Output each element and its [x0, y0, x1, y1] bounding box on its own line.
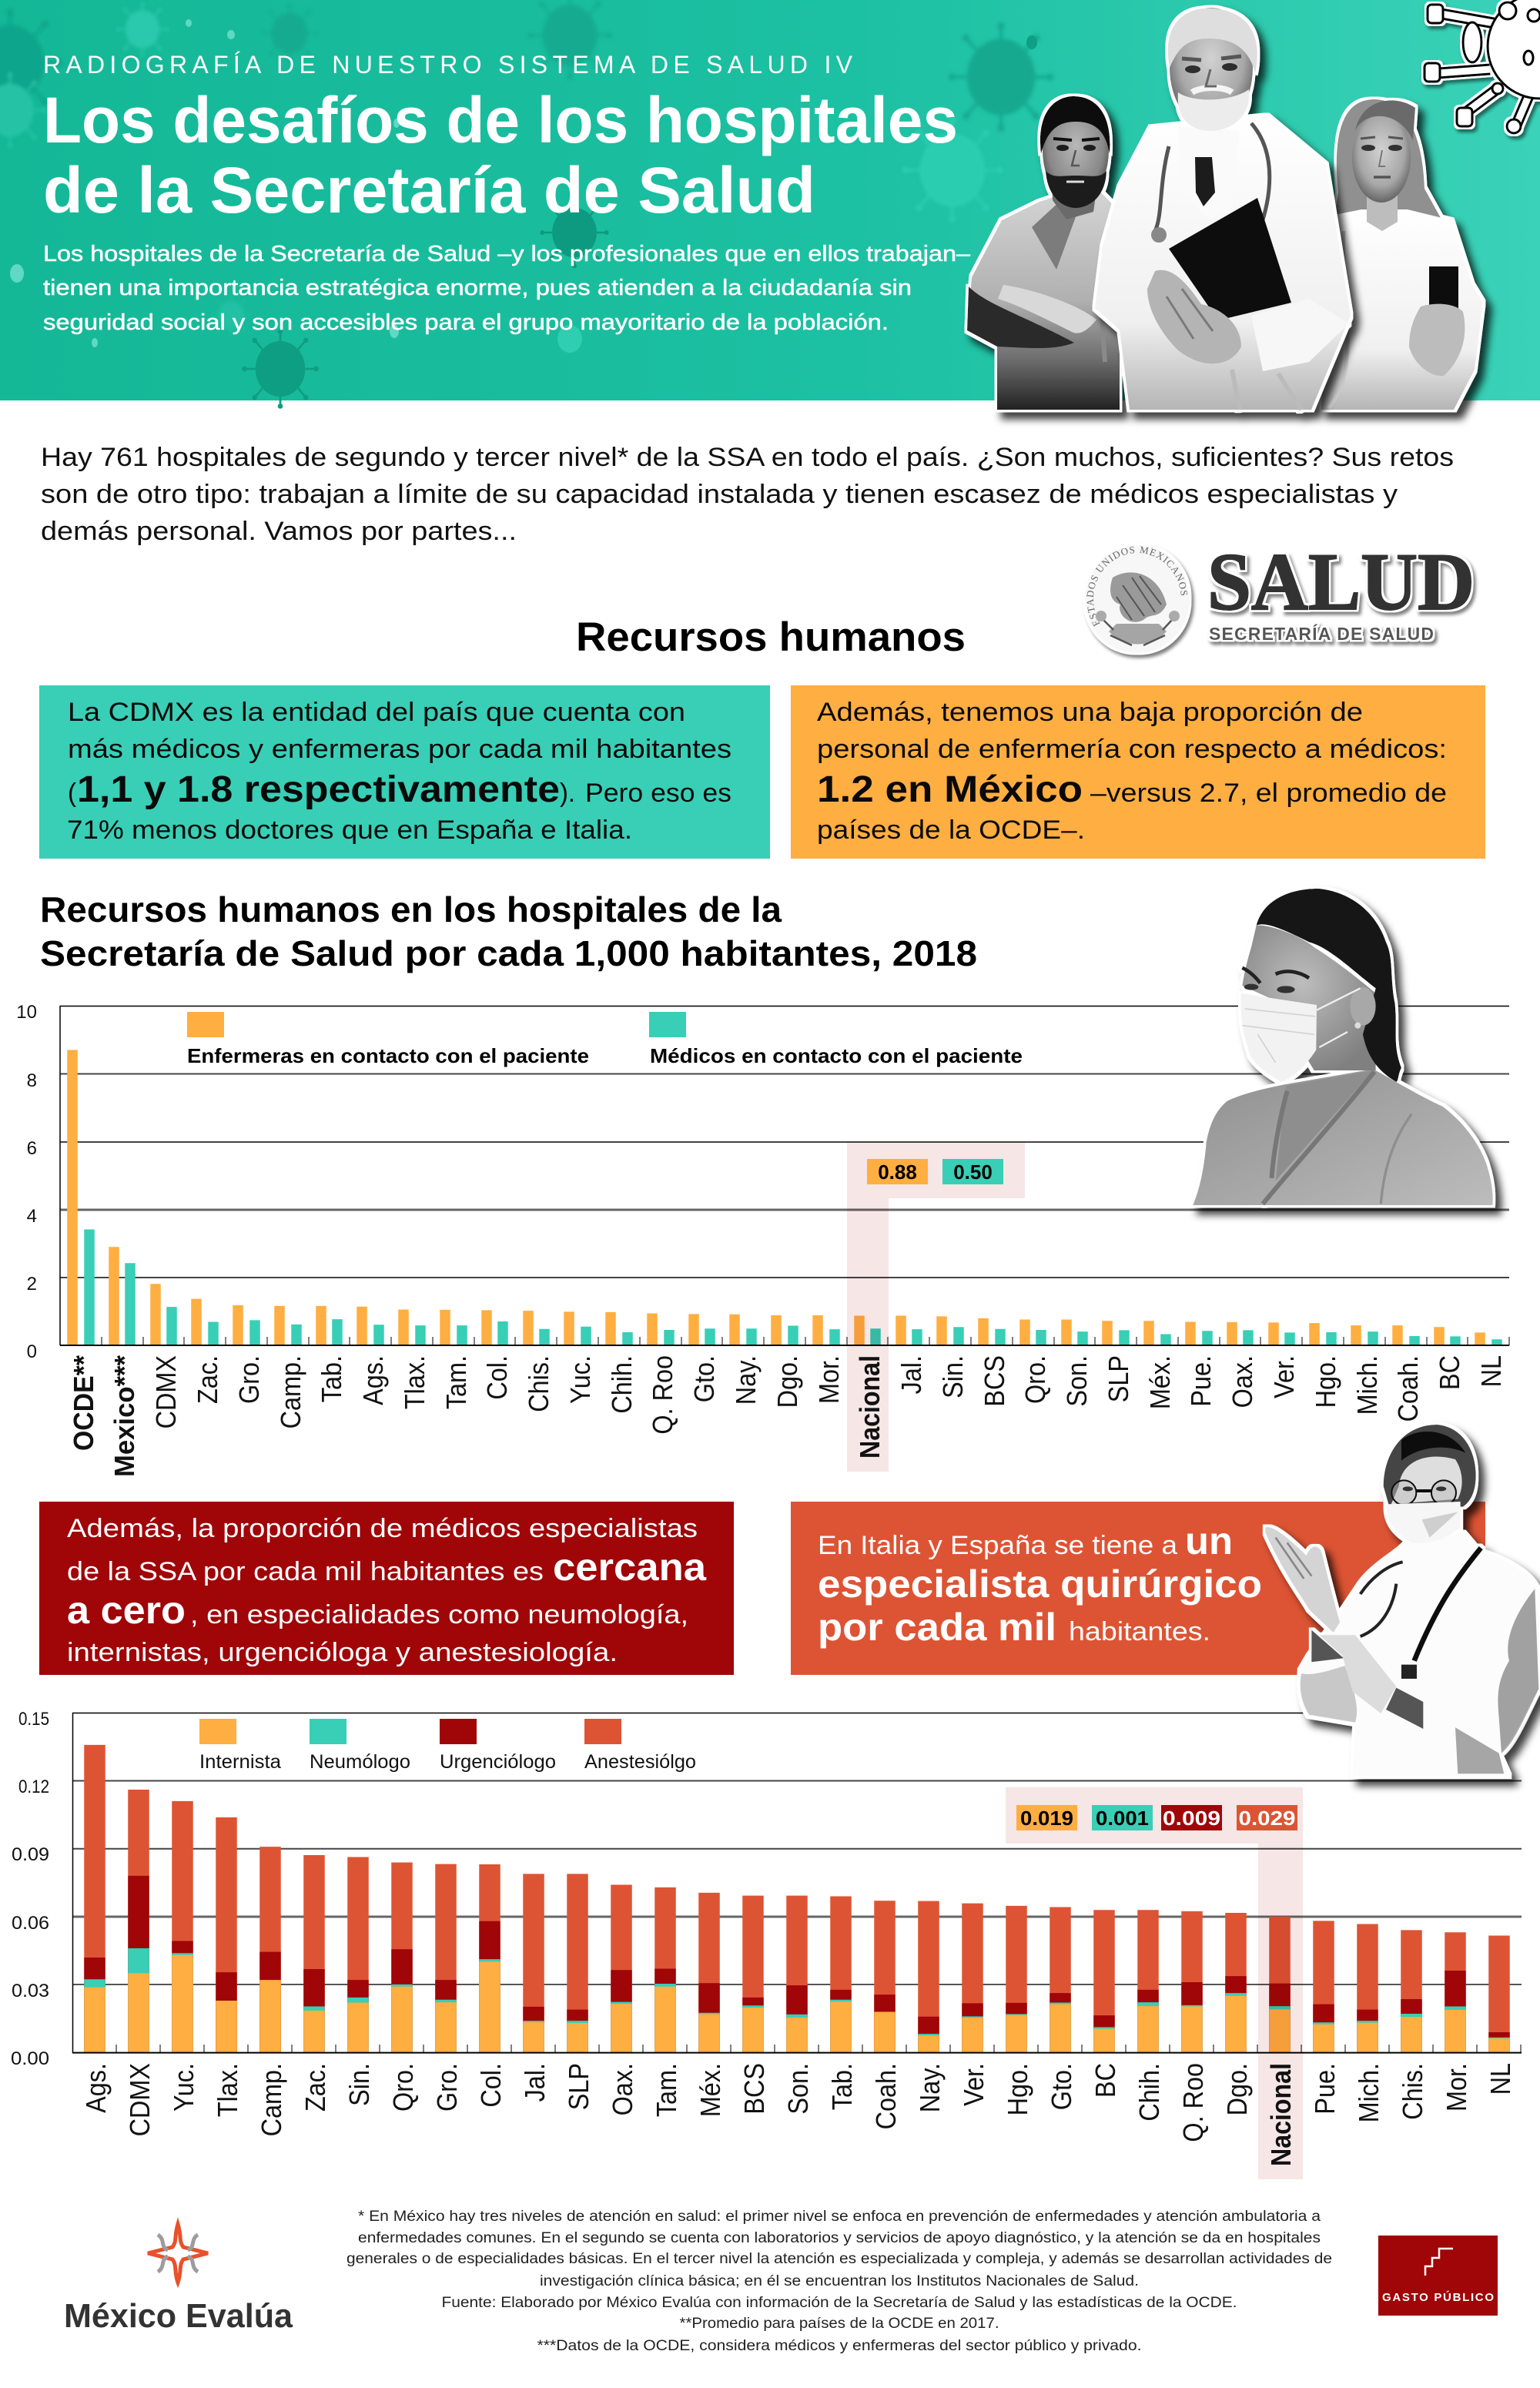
- y axis labels: [11, 1709, 49, 2069]
- section heading: Recursos humanos: Recursos humanos: [576, 615, 966, 660]
- x axis labels: Yuc.: [169, 2063, 199, 2112]
- panel: CDMX callout: 71% menos doctores que en España e Italia.: [67, 816, 632, 845]
- panel: specialists callout: cercana: [553, 1546, 707, 1589]
- internist series: [95, 1955, 1499, 2053]
- x axis labels: Nacional: [1265, 2063, 1297, 2166]
- x axis labels: NL: [1485, 2063, 1516, 2095]
- panel: CDMX callout: 1,1 y 1.8 respectivamente: [77, 769, 560, 810]
- y axis labels: 8: [27, 1070, 37, 1091]
- emergency physician series: [95, 1876, 1499, 2053]
- panel: nursing ratio callout: países de la OCDE–.: [817, 816, 1085, 845]
- x axis labels: Jal.: [520, 2063, 551, 2102]
- y axis labels: 4: [27, 1206, 37, 1227]
- x axis labels: [68, 1355, 1507, 1477]
- x axis labels: Tlax.: [213, 2063, 243, 2117]
- x axis labels: Gro.: [234, 1355, 265, 1404]
- x axis labels: Coah.: [1393, 1355, 1424, 1422]
- x axis labels: Mich.: [1354, 2063, 1384, 2122]
- icon: México Evalúa star: [148, 2224, 208, 2282]
- bar chart: specialists per 1,000 inhabitants: [11, 1709, 1522, 2179]
- x axis labels: Méx.: [1145, 1355, 1176, 1409]
- photo: nurse with mask: [1193, 889, 1493, 1205]
- chart title: recursos humanos: Recursos humanos en los hospitales de la: [40, 889, 782, 929]
- x axis labels: Nay.: [731, 1355, 762, 1405]
- header background: [0, 0, 1540, 400]
- y axis labels: 0.06: [12, 1913, 49, 1934]
- x axis labels: Hgo.: [1003, 2063, 1033, 2115]
- doctors series: [89, 1230, 1497, 1345]
- panel: nursing ratio callout: Además, tenemos una baja proporción de: [817, 698, 1363, 727]
- legend: Internista: [199, 1751, 281, 1773]
- icon: national seal: [1083, 546, 1197, 661]
- x axis labels: Chih.: [607, 1355, 638, 1414]
- x axis labels: Chis.: [524, 1355, 554, 1412]
- label: GASTO PÚBLICO: [1382, 2290, 1494, 2304]
- x axis labels: Coah.: [871, 2063, 902, 2129]
- x axis labels: Pue.: [1186, 1355, 1217, 1407]
- x axis labels: SLP: [564, 2063, 594, 2110]
- background virus pattern: [0, 0, 1053, 409]
- value badges: Nacional: 0.001: [1096, 1807, 1149, 1830]
- header banner: [0, 0, 1540, 410]
- panel: CDMX callout: Pero eso es: [585, 779, 732, 808]
- x axis labels: Sin.: [344, 2063, 375, 2106]
- x axis labels: Qro.: [1020, 1355, 1051, 1404]
- x axis labels: Tam.: [441, 1355, 472, 1409]
- logo subtitle: SECRETARÍA DE SALUD: [1209, 623, 1434, 644]
- x axis labels: Nacional: [854, 1355, 886, 1459]
- x axis labels: BCS: [739, 2063, 770, 2115]
- panel: specialists callout: Además, la proporción de médicos especialistas: [67, 1514, 698, 1543]
- title: de la Secretaría de Salud: [43, 154, 815, 226]
- legend: Enfermeras en contacto con el paciente: [187, 1044, 589, 1067]
- x axis labels: Camp.: [276, 1355, 306, 1428]
- x axis labels: Gro.: [432, 2063, 463, 2112]
- y axis labels: 10: [16, 1002, 37, 1023]
- panel: specialists callout: a cero: [67, 1589, 186, 1632]
- legend: Anestesiólgo: [584, 1751, 696, 1773]
- logo: Gasto Público: [1378, 2236, 1498, 2316]
- footnotes: [346, 2209, 1332, 2354]
- panel: specialists callout: [39, 1502, 734, 1675]
- footnotes: Fuente: Elaborado por México Evalúa con información de la Secretaría de Salud y las estadísticas de la OCDE.: [442, 2295, 1237, 2311]
- panel: nursing ratio callout: 1.2 en México: [817, 769, 1083, 810]
- value badges: Nacional: 0.019: [1020, 1807, 1073, 1830]
- value badges: Nacional: 0.50: [953, 1161, 993, 1184]
- x axis labels: Chih.: [1134, 2063, 1165, 2122]
- panel: specialists callout: , en especialidades como neumología,: [190, 1600, 688, 1629]
- x axis labels: CDMX: [125, 2063, 156, 2136]
- x axis labels: Son.: [1062, 1355, 1093, 1407]
- logo: México Evalúa: [64, 2224, 293, 2335]
- x axis labels: Zac.: [300, 2063, 331, 2112]
- x axis labels: CDMX: [151, 1355, 182, 1428]
- legend: Neumólogo: [310, 1751, 410, 1773]
- x axis labels: Col.: [482, 1355, 513, 1400]
- kicker: RADIOGRAFÍA DE NUESTRO SISTEMA DE SALUD IV: [43, 51, 853, 79]
- footnotes: enfermedades comunes. En el segundo se cuenta con laboratorios y servicios de apoyo diagnóstico, y la atención se da en hospitales: [358, 2230, 1321, 2246]
- photo: female doctor: [1321, 99, 1483, 410]
- x axis labels: Mor.: [814, 1355, 845, 1404]
- x axis labels: Son.: [783, 2063, 814, 2115]
- nurses series: [72, 1050, 1480, 1345]
- value badges: Nacional: [1016, 1805, 1297, 1830]
- panel: Italy and Spain callout: especialista quirúrgico: [818, 1562, 1262, 1606]
- intro paragraph: [41, 443, 1454, 546]
- panel: CDMX callout: más médicos y enfermeras por cada mil habitantes: [68, 735, 732, 764]
- anesthesiologist series: [95, 1745, 1499, 2053]
- panel: CDMX callout: La CDMX es la entidad del país que cuenta con: [68, 698, 685, 727]
- panel: Italy and Spain callout: [791, 1502, 1485, 1675]
- icon: stairs: [1425, 2249, 1453, 2276]
- logo wordmark: SALUD: [1207, 537, 1475, 627]
- intro paragraph: son de otro tipo: trabajan a límite de su capacidad instalada y tienen escasez de médicos especialistas y: [41, 480, 1398, 509]
- x axis labels: SLP: [1103, 1355, 1134, 1402]
- header intro text: seguridad social y son accesibles para el grupo mayoritario de la población.: [43, 310, 889, 335]
- panel: specialists callout: internistas, urgencióloga y anestesiología.: [67, 1638, 618, 1667]
- pulmonologist series: [95, 1948, 1499, 2053]
- panel: Italy and Spain callout: por cada mil: [818, 1606, 1056, 1649]
- title: Los desafíos de los hospitales: [43, 84, 958, 156]
- x axis labels: Chis.: [1398, 2063, 1428, 2120]
- x axis labels: Mexico***: [109, 1355, 140, 1477]
- x axis labels: Pue.: [1310, 2063, 1341, 2115]
- x axis labels: Gto.: [1046, 2063, 1077, 2110]
- legend: Médicos en contacto con el paciente: [650, 1044, 1023, 1067]
- x axis labels: BC: [1090, 2063, 1121, 2098]
- x axis labels: Q. Roo: [1178, 2063, 1209, 2142]
- panel: Italy and Spain callout: En Italia y España se tiene a: [818, 1531, 1177, 1560]
- panel: Italy and Spain callout: un: [1185, 1519, 1233, 1562]
- x axis labels: Oax.: [1227, 1355, 1258, 1408]
- x axis labels: Ags.: [81, 2063, 112, 2113]
- panel: nursing ratio callout: [791, 685, 1485, 859]
- x axis labels: Mich.: [1352, 1355, 1383, 1415]
- x axis labels: Hgo.: [1311, 1355, 1341, 1408]
- intro paragraph: demás personal. Vamos por partes...: [41, 517, 517, 546]
- x axis labels: Ver.: [959, 2063, 989, 2106]
- footnotes: * En México hay tres niveles de atención en salud: el primer nivel se enfoca en prevención de enfermedades y atención ambulatoria a: [358, 2209, 1321, 2225]
- logo wordmark: México Evalúa: [64, 2297, 293, 2335]
- x axis labels: Méx.: [695, 2063, 726, 2117]
- icon: virus sticker: [1424, 0, 1540, 133]
- y axis labels: 0.03: [12, 1981, 49, 2001]
- x axis labels: Dgo.: [772, 1355, 803, 1408]
- x axis labels: Ags.: [358, 1355, 389, 1405]
- x axis labels: Dgo.: [1222, 2063, 1253, 2115]
- footnotes: **Promedio para países de la OCDE en 2017.: [679, 2316, 999, 2332]
- x axis labels: Col.: [476, 2063, 507, 2108]
- photo: male nurse: [967, 96, 1120, 410]
- footnotes: generales o de especialidades básicas. En el tercer nivel la atención es especializada y compleja, y además se desarrollan actividades de: [346, 2251, 1332, 2267]
- photo: senior doctor: [1095, 8, 1351, 410]
- legend: [199, 1719, 696, 1773]
- panel: nursing ratio callout: –versus 2.7, el promedio de: [1090, 779, 1447, 808]
- highlight: Nacional column: [847, 1142, 1025, 1472]
- x axis labels: BC: [1435, 1355, 1465, 1390]
- header intro text: [43, 242, 971, 335]
- bar chart: personnel per 1,000 inhabitants: [16, 1002, 1509, 1477]
- footnotes: investigación clínica básica; en él se encuentran los Institutos Nacionales de Salud.: [540, 2273, 1139, 2289]
- panel: Italy and Spain callout: habitantes.: [1069, 1617, 1210, 1646]
- x axis labels: Gto.: [689, 1355, 720, 1402]
- x axis labels: OCDE**: [68, 1355, 99, 1451]
- x axis labels: Sin.: [938, 1355, 969, 1398]
- intro paragraph: Hay 761 hospitales de segundo y tercer nivel* de la SSA en todo el país. ¿Son muchos, suficientes? Sus retos: [41, 443, 1454, 472]
- x axis labels: [81, 2063, 1516, 2166]
- photo: surgeon with gloves: [1265, 1425, 1540, 1777]
- icon: national seal: ESTADOS UNIDOS MEXICANOS: [1086, 546, 1187, 627]
- value badges: Nacional: 0.029: [1238, 1807, 1295, 1830]
- y axis labels: 0.00: [11, 2048, 49, 2069]
- x axis labels: Mor.: [1441, 2063, 1472, 2112]
- y axis labels: [16, 1002, 37, 1362]
- x axis labels: Oax.: [608, 2063, 638, 2115]
- x axis labels: Tab.: [316, 1355, 347, 1402]
- y axis labels: 0.15: [18, 1709, 49, 1730]
- x axis labels: Camp.: [256, 2063, 287, 2136]
- header intro text: Los hospitales de la Secretaría de Salud –y los profesionales que en ellos trabajan–: [43, 242, 971, 266]
- x axis labels: Q. Roo: [648, 1355, 678, 1435]
- chart title: recursos humanos: Secretaría de Salud por cada 1,000 habitantes, 2018: [40, 933, 977, 973]
- header intro text: tienen una importancia estratégica enorme, pues atienden a la ciudadanía sin: [43, 276, 912, 300]
- x axis labels: BCS: [979, 1355, 1010, 1407]
- x axis labels: Jal.: [896, 1355, 927, 1394]
- y axis labels: 0.09: [12, 1844, 49, 1865]
- x axis labels: Qro.: [388, 2063, 419, 2112]
- x axis labels: NL: [1476, 1355, 1507, 1387]
- legend: Urgenciólogo: [440, 1751, 556, 1773]
- value badges: Nacional: [867, 1159, 1003, 1184]
- x axis labels: Nay.: [915, 2063, 946, 2112]
- x axis labels: Tlax.: [400, 1355, 430, 1409]
- logo: Secretaría de Salud: [1083, 537, 1478, 661]
- y axis labels: 0: [27, 1341, 37, 1362]
- panel: specialists callout: de la SSA por cada mil habitantes es: [67, 1557, 544, 1586]
- panel: CDMX callout: ).: [560, 779, 575, 808]
- value badges: Nacional: 0.009: [1163, 1807, 1220, 1830]
- highlight: Nacional column: [1006, 1787, 1303, 2179]
- panel: CDMX callout: (: [68, 779, 77, 808]
- x axis labels: Tab.: [827, 2063, 858, 2110]
- chart title: recursos humanos: [40, 889, 977, 973]
- value badges: Nacional: 0.88: [878, 1161, 917, 1184]
- y axis labels: 6: [27, 1138, 37, 1159]
- panel: CDMX callout: [39, 685, 770, 859]
- footnotes: ***Datos de la OCDE, considera médicos y enfermeras del sector público y privado.: [537, 2338, 1141, 2354]
- panel: nursing ratio callout: personal de enfermería con respecto a médicos:: [817, 735, 1447, 764]
- x axis labels: Yuc.: [565, 1355, 596, 1404]
- legend: [187, 1012, 1023, 1067]
- x axis labels: Zac.: [192, 1355, 223, 1404]
- title: [43, 84, 958, 226]
- y axis labels: 2: [27, 1274, 37, 1294]
- x axis labels: Tam.: [651, 2063, 682, 2117]
- x axis labels: Ver.: [1269, 1355, 1300, 1398]
- y axis labels: 0.12: [18, 1777, 49, 1797]
